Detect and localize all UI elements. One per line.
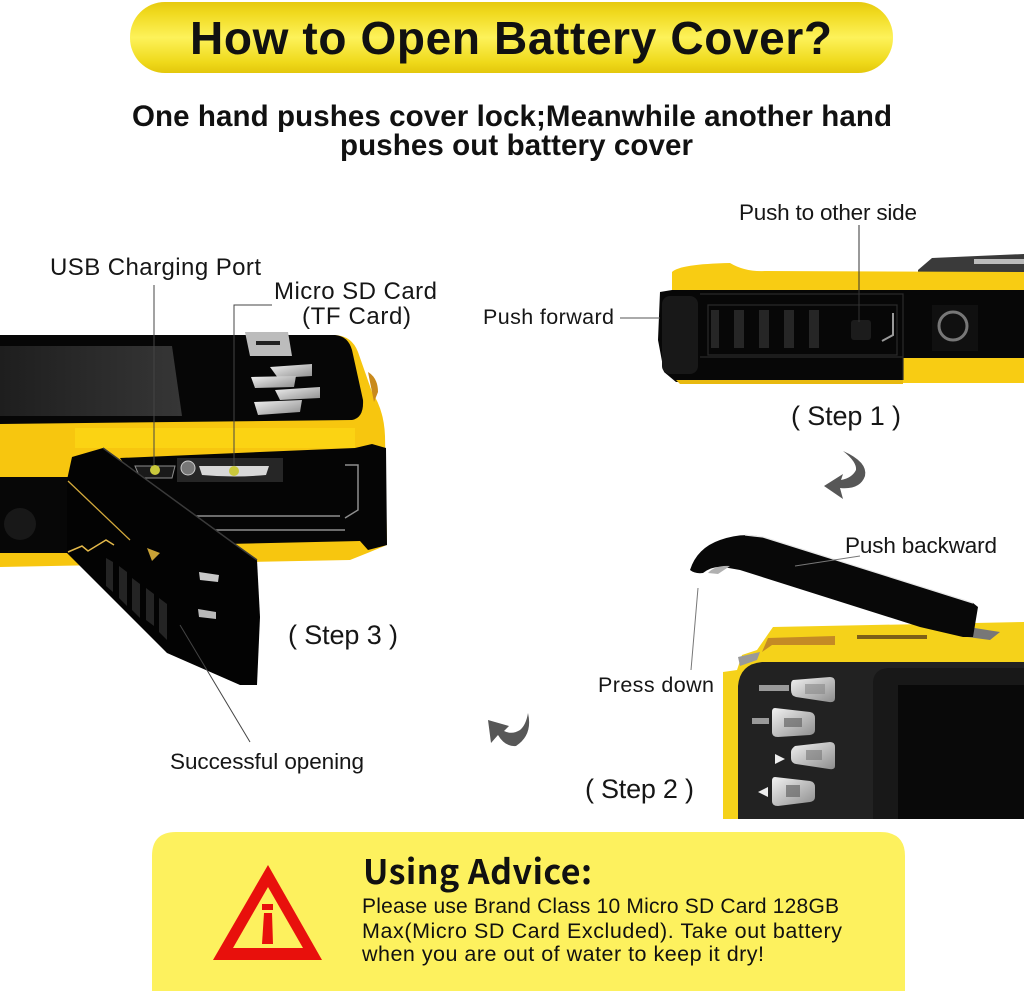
- yellow top: [672, 263, 1024, 292]
- open door: [690, 535, 978, 637]
- side orange lip: [368, 372, 378, 402]
- step 3 label: ( Step 3 ): [288, 620, 398, 650]
- left lower black section with tripod socket: [0, 477, 75, 553]
- icon: warning triangle: [213, 865, 322, 960]
- camera yellow body: [0, 335, 387, 567]
- label: push to other side with leader: Push to other side: [739, 200, 917, 225]
- hinge grey stub: [738, 652, 760, 666]
- black body: [658, 290, 1024, 382]
- advice heading: Using Advice:: [363, 845, 592, 894]
- open compartment: [120, 444, 387, 550]
- camera photo: step 1, closed battery door: [658, 254, 1024, 384]
- step 2 label: ( Step 2 ): [585, 774, 694, 804]
- tripod socket: [932, 305, 978, 351]
- label: push backward with leader: Push backward: [845, 533, 997, 558]
- step 1 label: ( Step 1 ): [791, 401, 901, 431]
- subtitle instruction: One hand pushes cover lock;Meanwhile another hand: [132, 100, 892, 133]
- orange cavity strip: [762, 636, 835, 652]
- door ribs: [711, 310, 819, 348]
- hinge: [960, 626, 1000, 640]
- subtitle instruction: pushes out battery cover: [340, 129, 694, 162]
- advice body text: Max(Micro SD Card Excluded). Take out battery: [362, 919, 842, 943]
- arrow: step 1 to step 2: [824, 451, 865, 499]
- cover lock: [851, 313, 893, 341]
- panel: using advice: [152, 832, 905, 991]
- yellow body: [723, 622, 1024, 819]
- advice body text: Please use Brand Class 10 Micro SD Card 128GB: [362, 895, 839, 918]
- yellow bottom strip: [903, 358, 1024, 383]
- advice body text: when you are out of water to keep it dry!: [361, 942, 764, 966]
- label: press down with leader: [598, 588, 714, 697]
- camera photo: step 2, door lifting: [690, 535, 1024, 819]
- black back: [738, 662, 1024, 819]
- screen bezel: [873, 668, 1024, 819]
- usb port and sd slot: [135, 458, 283, 482]
- label: push backward with leader: [795, 533, 997, 566]
- bright yellow highlight band: [75, 428, 355, 448]
- title banner: How to Open Battery Cover?: [190, 12, 832, 64]
- lens top: [918, 254, 1024, 272]
- label: Micro SD card with leader: (TF Card): [302, 303, 411, 330]
- subtitle instruction: [132, 100, 892, 162]
- title banner: [130, 2, 893, 73]
- camera back buttons: [245, 332, 320, 415]
- compartment reflections: [190, 465, 358, 530]
- camera photo: step 3, open battery door: [0, 332, 387, 685]
- label: USB charging port with leader: USB Charging Port: [50, 254, 261, 281]
- label: Micro SD card with leader: [234, 278, 437, 466]
- lcd screen: [0, 346, 182, 416]
- screen: [898, 685, 1024, 819]
- door ribs: [106, 558, 167, 640]
- label: successful opening with leader: Successful opening: [170, 749, 364, 774]
- label: Micro SD card with leader: Micro SD Card: [274, 278, 437, 305]
- arrow: step 2 to step 3: [488, 713, 529, 746]
- battery door: [67, 448, 260, 685]
- advice body text: [361, 895, 842, 966]
- port callout dots: [150, 465, 160, 475]
- back panel black: [0, 335, 363, 424]
- buttons: [752, 677, 835, 806]
- grip highlight: [662, 296, 698, 374]
- label: press down with leader: Press down: [598, 673, 714, 697]
- label: push forward with leader: Push forward: [483, 305, 614, 329]
- door seams: [700, 294, 903, 380]
- label: successful opening with leader: [170, 625, 364, 774]
